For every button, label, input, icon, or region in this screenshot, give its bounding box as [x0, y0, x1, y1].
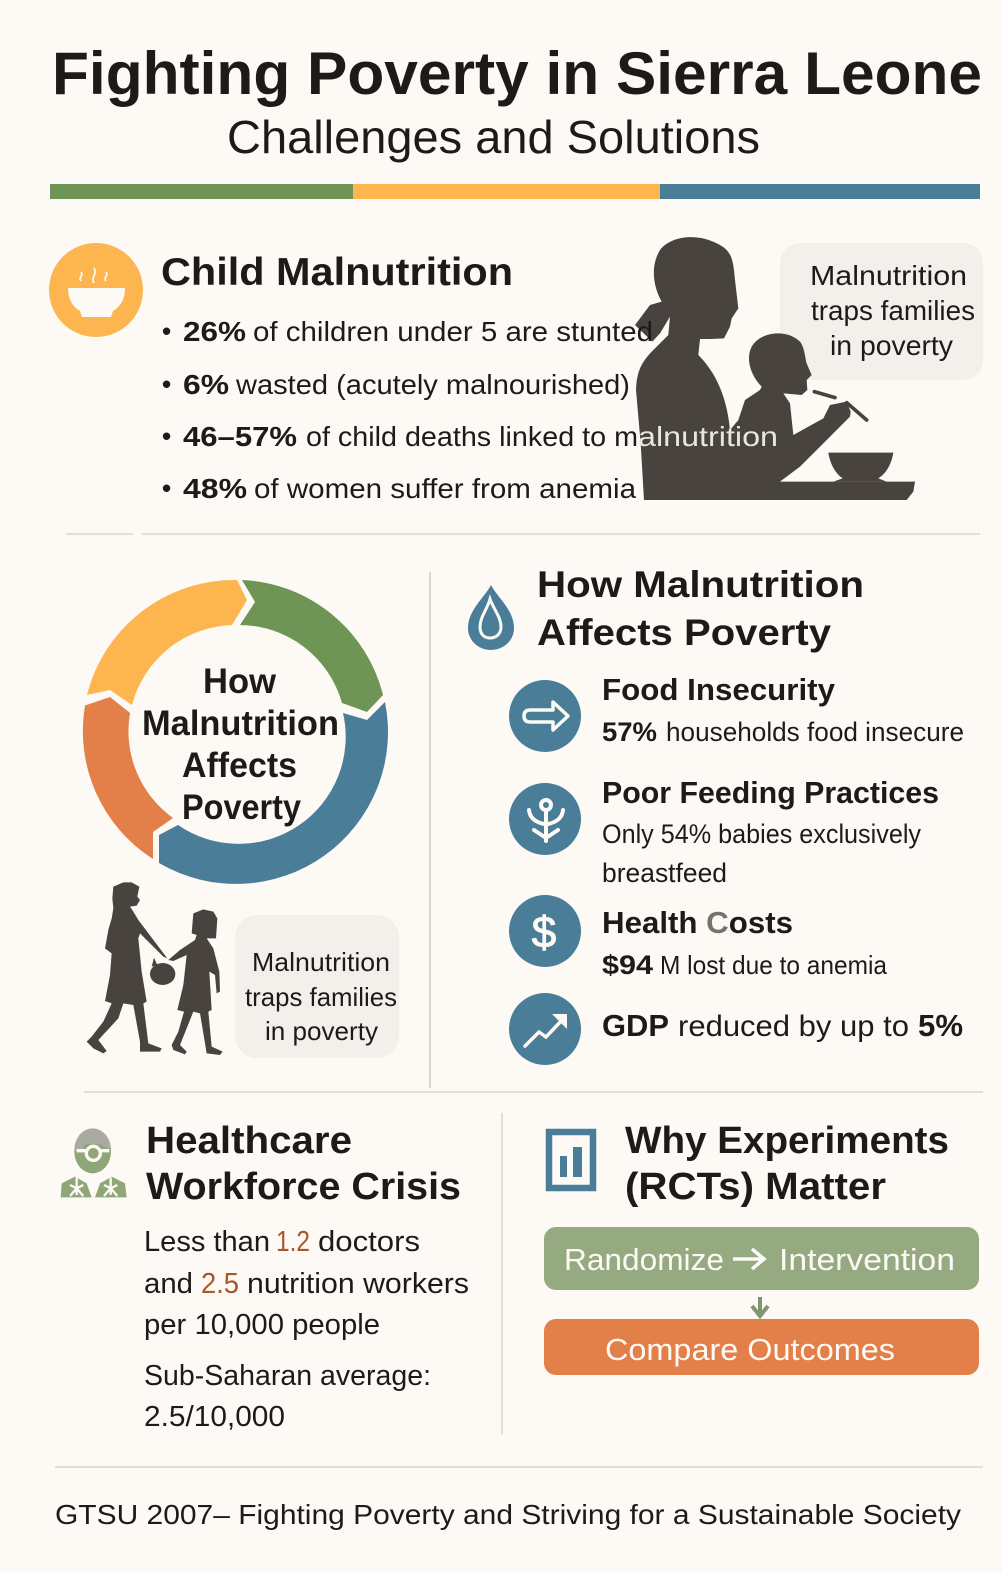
- callout: malnutrition traps families: traps families: [245, 982, 397, 1012]
- flow box: compare outcomes: Compare Outcomes: [605, 1332, 895, 1367]
- stat: anemia: •: [162, 473, 171, 503]
- chart: cycle ring: [83, 580, 388, 884]
- stat: anemia: of women suffer from anemia: [254, 473, 636, 504]
- heading: why experiments matter: (RCTs) Matter: [625, 1166, 886, 1208]
- icon: soup bowl: [49, 243, 143, 337]
- item: poor feeding practices: Poor Feeding Practices: [602, 775, 939, 810]
- item: food insecurity: households food insecure: [666, 717, 964, 747]
- item: poor feeding practices: Only 54% babies exclusively: [602, 819, 921, 849]
- ring center label: [142, 662, 339, 827]
- flow box: randomize to intervention: Randomize: [564, 1242, 724, 1277]
- item: health costs: $94: [602, 950, 653, 980]
- callout: malnutrition traps families: [780, 243, 983, 380]
- panel: healthcare workforce crisis: [61, 1120, 469, 1433]
- item: health costs: M lost due to anemia: [660, 950, 887, 980]
- heading: why experiments matter: Why Experiments: [625, 1120, 949, 1162]
- ring center label: Affects: [182, 746, 297, 785]
- stat: stunting: 26%: [183, 316, 246, 347]
- stat: child deaths: of child deaths linked to m: [306, 421, 638, 452]
- text: workforce statistics: 2.5: [201, 1268, 239, 1300]
- panel: child malnutrition: [49, 237, 983, 504]
- callout: malnutrition traps families: [235, 915, 399, 1058]
- text: workforce statistics: 2.5/10,000: [144, 1401, 285, 1433]
- heading: how malnutrition affects poverty: How Malnutrition: [537, 564, 864, 605]
- callout: malnutrition traps families: traps families: [811, 295, 975, 326]
- text: workforce statistics: 1.2: [276, 1226, 310, 1258]
- heading: healthcare workforce crisis: Workforce Crisis: [146, 1166, 461, 1208]
- silhouette: woman and child walking: [87, 882, 223, 1055]
- stat: child deaths: •: [162, 421, 171, 451]
- flow box: randomize to intervention: [544, 1227, 979, 1290]
- icon: sprout: [509, 783, 581, 855]
- flow box: compare outcomes: [544, 1319, 979, 1375]
- item: poor feeding practices: [509, 775, 939, 888]
- stat: wasting: •: [162, 369, 171, 399]
- icon: bar chart: [549, 1132, 593, 1188]
- text: workforce statistics: Sub-Saharan average:: [144, 1360, 431, 1392]
- callout: malnutrition traps families: in poverty: [830, 330, 953, 361]
- silhouette: mother and child eating: [635, 237, 915, 500]
- item: poor feeding practices: breastfeed: [602, 858, 727, 888]
- text: workforce statistics: doctors: [318, 1226, 420, 1258]
- panel: poverty cycle: [83, 580, 399, 1058]
- callout: malnutrition traps families: Malnutrition: [810, 260, 967, 291]
- item: gdp reduced: 5%: [918, 1008, 963, 1043]
- text: workforce statistics: per 10,000 people: [144, 1309, 380, 1341]
- stat: child deaths: [162, 421, 778, 452]
- panel: how malnutrition affects poverty: [468, 564, 964, 1065]
- heading: healthcare workforce crisis: Healthcare: [146, 1120, 352, 1162]
- stat: stunting: •: [162, 316, 171, 346]
- footer: GTSU 2007– Fighting Poverty and Striving for a Sustainable Society: [55, 1499, 961, 1530]
- item: health costs: Health Costs: [602, 905, 793, 940]
- subtitle: Challenges and Solutions: [227, 111, 760, 163]
- heading: why experiments matter: [625, 1120, 949, 1208]
- callout: malnutrition traps families: Malnutrition: [252, 947, 390, 977]
- text: workforce statistics: Less than: [144, 1226, 270, 1258]
- item: health costs: [509, 895, 887, 980]
- text: workforce statistics: [144, 1226, 469, 1433]
- tricolor header bar: [50, 184, 980, 199]
- ring center label: Malnutrition: [142, 704, 339, 743]
- ring center label: How: [203, 662, 277, 701]
- icon: arrow: [509, 680, 581, 752]
- stat: child deaths: alnutrition: [638, 421, 778, 452]
- heading: how malnutrition affects poverty: [537, 564, 864, 653]
- icon: water drop: [468, 585, 514, 650]
- item: gdp reduced: GDP: [602, 1008, 669, 1043]
- flow box: randomize to intervention: Intervention: [779, 1242, 955, 1277]
- text: workforce statistics: nutrition workers: [247, 1268, 469, 1300]
- icon: rising chart arrow: [509, 993, 581, 1065]
- item: gdp reduced: reduced by up to: [678, 1010, 909, 1043]
- stat: wasting: wasted (acutely malnourished): [235, 369, 630, 400]
- panel: why experiments matter: [544, 1120, 979, 1375]
- title: Fighting Poverty in Sierra Leone: [52, 40, 982, 107]
- item: food insecurity: Food Insecurity: [602, 672, 836, 707]
- heading: child malnutrition: Child Malnutrition: [161, 251, 513, 294]
- heading: how malnutrition affects poverty: Affects Poverty: [537, 612, 831, 653]
- arrow: down: [752, 1297, 768, 1316]
- icon: dollar: $: [532, 908, 556, 957]
- item: gdp reduced: [509, 993, 963, 1065]
- stat: wasting: 6%: [183, 369, 229, 400]
- item: food insecurity: 57%: [602, 717, 657, 747]
- icon: health workers: [61, 1128, 127, 1197]
- stat: child deaths: 46–57%: [183, 421, 297, 452]
- stat: stunting: of children under 5 are stunted: [253, 316, 653, 347]
- item: food insecurity: [509, 672, 964, 752]
- text: workforce statistics: and: [144, 1268, 193, 1300]
- ring center label: Poverty: [182, 788, 301, 827]
- heading: healthcare workforce crisis: [146, 1120, 461, 1208]
- stat: anemia: 48%: [183, 473, 247, 504]
- callout: malnutrition traps families: in poverty: [265, 1016, 378, 1046]
- icon: dollar: [509, 895, 581, 967]
